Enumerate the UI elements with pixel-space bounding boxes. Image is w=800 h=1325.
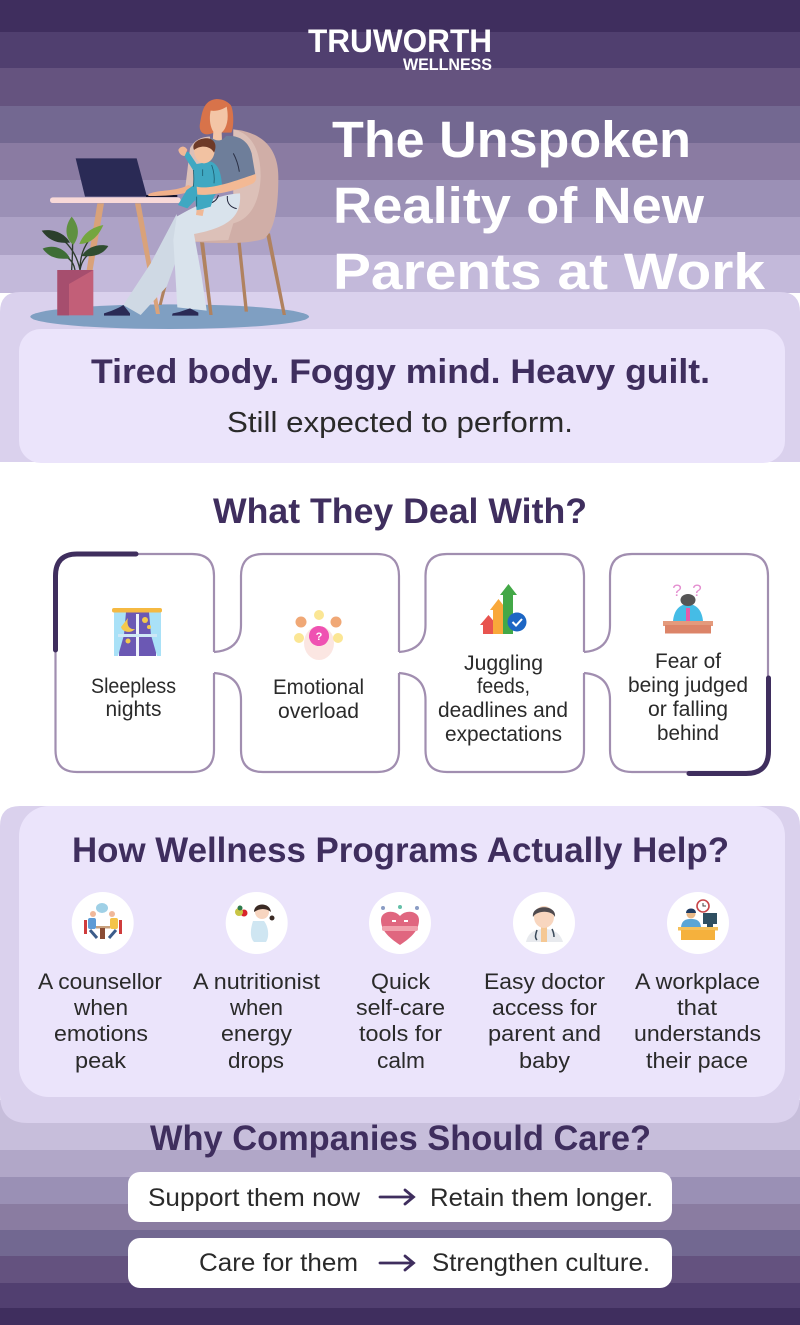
item: nutritionist: A nutritionist xyxy=(193,969,320,994)
card: sleepless nights: Sleepless xyxy=(91,675,176,698)
title: Reality of New xyxy=(333,177,704,234)
callout: support and retain: Retain them longer. xyxy=(430,1184,653,1212)
callout: care and culture: Care for them xyxy=(199,1249,358,1277)
card: fear of being judged: or falling xyxy=(648,698,728,721)
item: counsellor: peak xyxy=(75,1048,127,1073)
laptop xyxy=(76,158,177,197)
title: Parents at Work xyxy=(333,243,766,300)
callout: support and retain xyxy=(128,1172,672,1222)
icon: stressed person at desk xyxy=(663,581,713,634)
card: fear of being judged: Fear of xyxy=(655,650,721,673)
panel: wellness outer band xyxy=(0,806,800,1123)
arrow xyxy=(380,1256,414,1270)
item: self-care tools: Quick xyxy=(371,969,431,994)
item: nutritionist: when xyxy=(229,995,283,1020)
card: juggling: expectations xyxy=(445,723,562,746)
icon: stressed person at desk: ? xyxy=(692,581,702,600)
item: doctor access: Easy doctor xyxy=(484,969,605,994)
card: fear of being judged: behind xyxy=(657,722,719,745)
icon: calm heart xyxy=(369,892,431,954)
plant xyxy=(42,217,108,315)
item: counsellor: when xyxy=(73,995,128,1020)
panel: how wellness programs help xyxy=(19,806,785,1097)
item: doctor access: baby xyxy=(519,1048,570,1073)
icon: rising arrows xyxy=(480,584,526,634)
parent arm xyxy=(197,174,256,195)
item: self-care tools: tools for xyxy=(359,1021,442,1046)
card: juggling: deadlines and xyxy=(438,699,568,722)
item: nutritionist: drops xyxy=(228,1048,284,1073)
tagline heading: Tired body. Foggy mind. Heavy guilt. xyxy=(91,353,710,391)
icon: emotions around head: ? xyxy=(316,631,323,643)
item: understanding workplace: A workplace xyxy=(635,969,760,994)
item: self-care tools: self-care xyxy=(356,995,445,1020)
card: emotional overload xyxy=(273,610,364,723)
item: self-care tools xyxy=(356,892,445,1073)
tagline subtext: Still expected to perform. xyxy=(227,407,573,439)
card: sleepless nights: nights xyxy=(106,698,162,721)
title xyxy=(332,111,766,300)
heading: what they deal with: What They Deal With? xyxy=(213,492,587,531)
chair xyxy=(159,129,286,315)
callout: care and culture: Strengthen culture. xyxy=(432,1249,650,1277)
callout: care and culture xyxy=(128,1238,672,1288)
item: understanding workplace xyxy=(634,892,761,1073)
card: fear of being judged xyxy=(628,581,748,745)
item: understanding workplace: understands xyxy=(634,1021,761,1046)
logo: WELLNESS xyxy=(403,55,492,74)
card accent top left xyxy=(56,554,136,650)
baby xyxy=(178,138,222,216)
card: juggling xyxy=(438,584,568,746)
card: juggling: Juggling xyxy=(464,652,543,675)
item: counsellor xyxy=(38,892,162,1073)
card: juggling: feeds, xyxy=(477,675,530,698)
icon: counselling session xyxy=(72,892,134,954)
card: sleepless nights xyxy=(91,608,176,721)
item: understanding workplace: that xyxy=(677,995,717,1020)
icon: stressed person at desk: ? xyxy=(672,581,682,600)
card: fear of being judged: being judged xyxy=(628,674,748,697)
card: emotional overload: overload xyxy=(278,700,359,723)
item: doctor access xyxy=(484,892,605,1073)
callout: support and retain: Support them now xyxy=(148,1184,361,1212)
parent xyxy=(104,99,255,316)
card accent bottom right xyxy=(689,678,768,774)
item: self-care tools: calm xyxy=(377,1048,425,1073)
card: emotional overload: Emotional xyxy=(273,676,364,699)
desk xyxy=(50,197,181,314)
panel: top lavender band xyxy=(0,292,800,462)
icon: doctor xyxy=(513,892,575,954)
connected cards outline xyxy=(56,554,768,772)
item: counsellor: emotions xyxy=(54,1021,148,1046)
item: nutritionist xyxy=(193,892,320,1073)
icon: nutritionist xyxy=(226,892,288,954)
heading: why companies should care: Why Companies Should Care? xyxy=(150,1119,651,1158)
title: The Unspoken xyxy=(332,111,691,168)
item: counsellor: A counsellor xyxy=(38,969,162,994)
item: doctor access: parent and xyxy=(488,1021,601,1046)
arrow xyxy=(380,1190,414,1204)
icon: night window xyxy=(112,608,162,656)
heading: how wellness programs help: How Wellness Programs Actually Help? xyxy=(72,831,729,870)
item: understanding workplace: their pace xyxy=(646,1048,748,1073)
illustration: parent with baby working at a desk xyxy=(30,99,309,329)
panel: tagline xyxy=(19,329,785,463)
item: nutritionist: energy xyxy=(221,1021,292,1046)
logo xyxy=(308,23,492,74)
rug xyxy=(30,304,309,329)
icon: person at desk with clock xyxy=(667,892,729,954)
logo: TRUWORTH xyxy=(308,23,492,59)
item: doctor access: access for xyxy=(492,995,597,1020)
